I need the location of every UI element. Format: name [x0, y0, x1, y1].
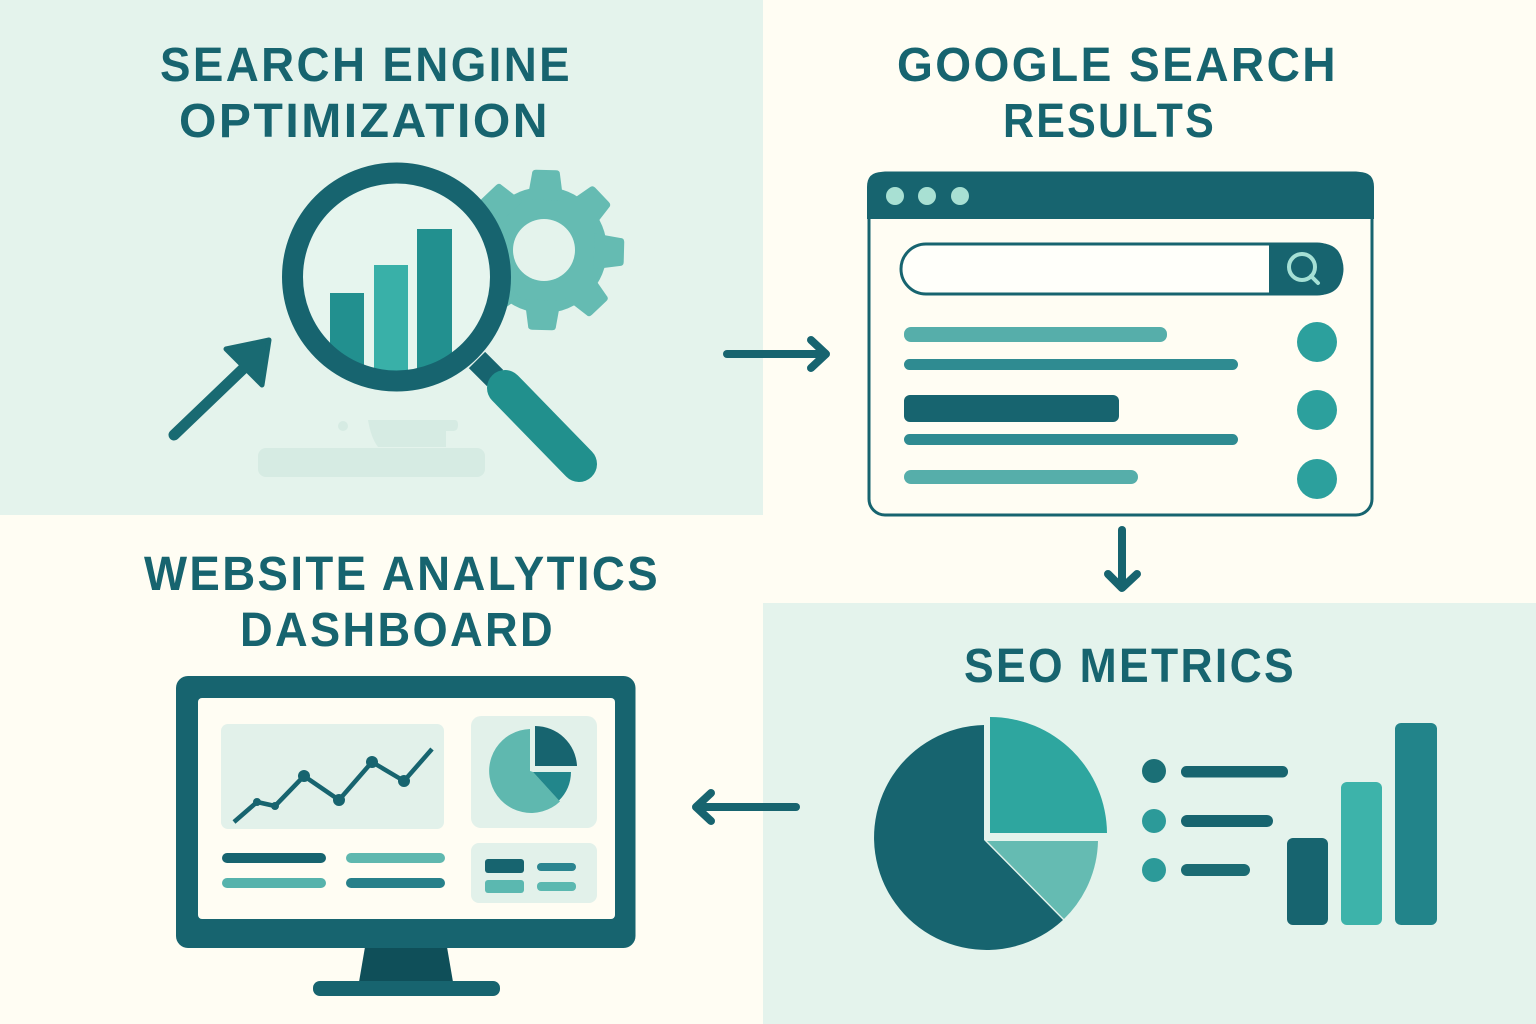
heading: google search results: GOOGLE SEARCH	[897, 39, 1338, 92]
heading: google search results	[897, 39, 1338, 148]
pie chart card	[471, 716, 597, 828]
panel: search engine optimization	[0, 0, 763, 515]
window dots	[886, 187, 969, 205]
panel: seo metrics	[763, 603, 1536, 1024]
heading: website analytics dashboard	[144, 548, 660, 657]
text lines	[222, 853, 445, 888]
icon: upward arrow	[174, 340, 269, 435]
search bar	[901, 243, 1343, 295]
result rows	[904, 322, 1337, 499]
heading: search engine optimization	[160, 39, 572, 148]
bar chart	[1287, 723, 1437, 925]
heading: search engine optimization: OPTIMIZATION	[179, 95, 550, 148]
faint desk decoration	[258, 420, 485, 477]
legend	[1142, 759, 1288, 882]
icon: computer monitor	[176, 676, 636, 996]
arrow: to analytics dashboard	[696, 793, 796, 821]
heading: search engine optimization: SEARCH ENGINE	[160, 39, 572, 92]
panel: browser window	[867, 172, 1374, 515]
heading: website analytics dashboard: WEBSITE ANALYTICS	[144, 548, 660, 601]
icon: gear	[462, 168, 626, 332]
heading: website analytics dashboard: DASHBOARD	[240, 604, 555, 657]
icon: magnifying glass with bars	[292, 173, 579, 464]
heading: seo metrics: SEO METRICS	[964, 640, 1296, 693]
heading: google search results: RESULTS	[1003, 95, 1216, 148]
arrow: to google results	[727, 340, 826, 368]
mini table card	[471, 843, 597, 903]
line chart card	[221, 724, 444, 829]
arrow: to seo metrics	[1108, 530, 1137, 588]
pie chart	[874, 717, 1107, 950]
